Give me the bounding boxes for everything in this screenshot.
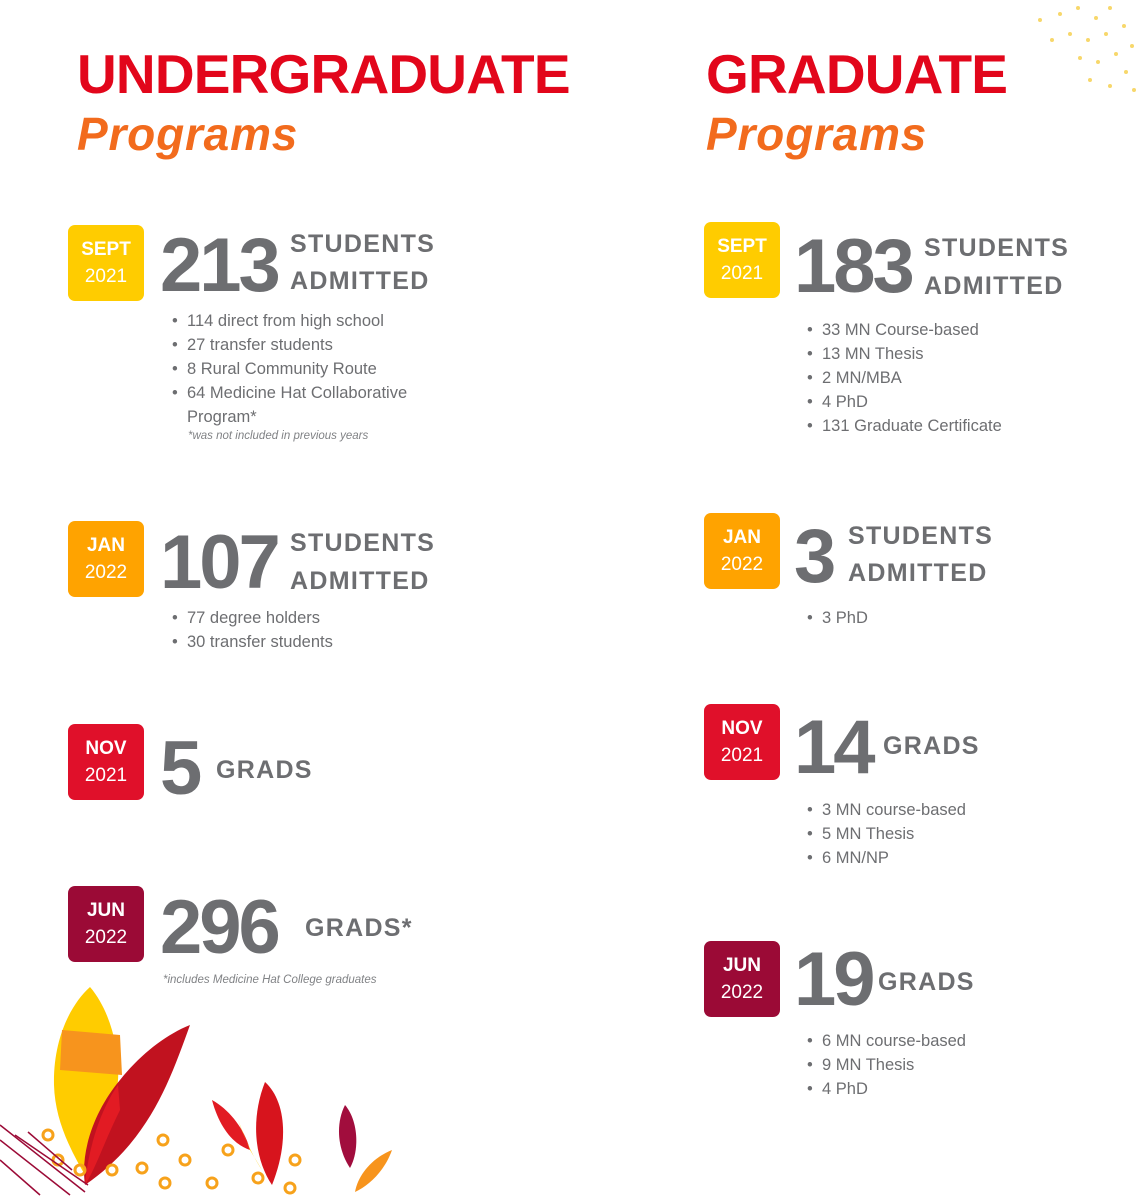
UG jan badge [68,521,144,597]
UG jan bullets: • [172,633,178,651]
UG jun badge [68,886,144,962]
G jan badge: 2022 [721,554,763,575]
G jan bullets: 3 PhD [822,609,868,627]
illustration: autumn leaves [0,987,392,1196]
G sept bullets: 33 MN Course-based [822,321,979,339]
G nov bullets: 6 MN/NP [822,849,889,867]
G nov bullets: • [807,801,813,819]
G jan badge: JAN [723,527,761,548]
UG sept bullets: • [172,312,178,330]
title: undergraduate: Programs [77,108,298,160]
G sept bullets: • [807,369,813,387]
G jun bullets: • [807,1080,813,1098]
G sept badge: SEPT [717,236,767,257]
G sept bullets: 2 MN/MBA [822,369,902,387]
UG sept badge: SEPT [81,239,131,260]
G jan stat: STUDENTS [848,522,993,550]
UG sept bullets: Program* [187,408,257,426]
G nov stat: GRADS [883,732,980,760]
UG nov stat [160,726,313,811]
G jan stat: ADMITTED [848,559,988,587]
G nov stat: 14 [794,705,873,790]
G sept stat: STUDENTS [924,234,1069,262]
UG jun stat: GRADS* [305,914,413,942]
G sept stat: ADMITTED [924,272,1064,300]
UG sept stat: STUDENTS [290,230,435,258]
G jun bullets: • [807,1032,813,1050]
G nov bullets: 3 MN course-based [822,801,966,819]
UG jan badge: JAN [87,535,125,556]
G sept badge: 2021 [721,263,763,284]
G nov badge [704,704,780,780]
G nov bullets [807,801,966,867]
UG sept bullets: 64 Medicine Hat Collaborative [187,384,407,402]
G nov badge: NOV [721,718,763,739]
G jan bullets: • [807,609,813,627]
G jun stat [794,937,975,1022]
UG sept bullets: • [172,336,178,354]
G jan stat: 3 [794,514,833,599]
UG sept stat: 213 [160,223,278,308]
UG sept bullets: • [172,384,178,402]
title: undergraduate [77,43,570,160]
G sept bullets [807,321,1002,435]
UG nov stat: GRADS [216,756,313,784]
UG jan bullets: • [172,609,178,627]
G sept bullets: 13 MN Thesis [822,345,923,363]
UG jan stat [160,520,435,605]
UG nov badge [68,724,144,800]
G sept bullets: • [807,345,813,363]
UG jun badge: 2022 [85,927,127,948]
UG nov stat: 5 [160,726,199,811]
G jun badge [704,941,780,1017]
G jun bullets: 6 MN course-based [822,1032,966,1050]
title: graduate: Programs [706,108,927,160]
G jun bullets: 9 MN Thesis [822,1056,914,1074]
UG sept bullets: • [172,360,178,378]
UG jan bullets: 77 degree holders [187,609,320,627]
G sept bullets: 4 PhD [822,393,868,411]
G sept stat [794,224,1069,309]
UG sept bullets [172,312,407,442]
UG jun badge: JUN [87,900,125,921]
G sept bullets: • [807,417,813,435]
G jun stat: 19 [794,937,873,1022]
UG jan stat: 107 [160,520,278,605]
UG jan stat: ADMITTED [290,567,430,595]
decorative dots top right [1038,6,1136,92]
G jun stat: GRADS [878,968,975,996]
G jun badge: JUN [723,955,761,976]
UG sept bullets: 27 transfer students [187,336,333,354]
UG sept stat [160,223,435,308]
UG jun stat: 296 [160,885,278,970]
G jun badge: 2022 [721,982,763,1003]
UG nov badge: 2021 [85,765,127,786]
UG sept bullets: *was not included in previous years [188,430,368,442]
G jun bullets: 4 PhD [822,1080,868,1098]
G nov badge: 2021 [721,745,763,766]
UG jan bullets: 30 transfer students [187,633,333,651]
G sept bullets: 131 Graduate Certificate [822,417,1002,435]
UG jun stat [160,885,413,970]
UG jan bullets [172,609,333,651]
UG sept bullets: 114 direct from high school [187,312,384,330]
G sept stat: 183 [794,224,912,309]
G nov stat [794,705,980,790]
UG jan stat: STUDENTS [290,529,435,557]
G nov bullets: 5 MN Thesis [822,825,914,843]
G jan badge [704,513,780,589]
UG jun footnote: *includes Medicine Hat College graduates [163,974,377,986]
G jan stat [794,514,993,599]
G jun bullets: • [807,1056,813,1074]
G jun bullets [807,1032,966,1098]
G sept bullets: • [807,393,813,411]
title: undergraduate: UNDERGRADUATE [77,43,570,105]
UG sept stat: ADMITTED [290,267,430,295]
G nov bullets: • [807,849,813,867]
UG nov badge: NOV [85,738,127,759]
UG sept badge: 2021 [85,266,127,287]
UG sept badge [68,225,144,301]
title: graduate: GRADUATE [706,43,1007,105]
UG jan badge: 2022 [85,562,127,583]
UG sept bullets: 8 Rural Community Route [187,360,377,378]
G sept bullets: • [807,321,813,339]
G nov bullets: • [807,825,813,843]
G sept badge [704,222,780,298]
title: graduate [706,43,1007,160]
